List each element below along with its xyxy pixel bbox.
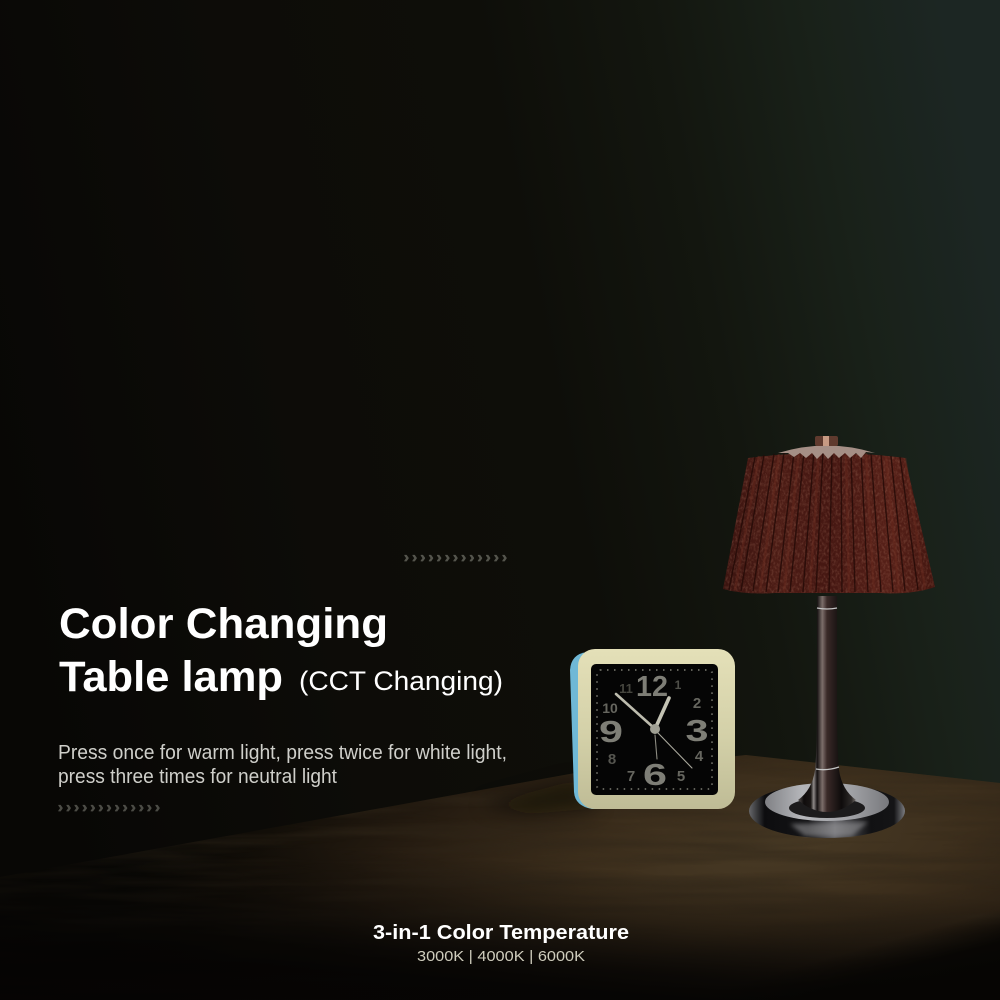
clock numerals: [599, 671, 708, 792]
lamp base: [749, 783, 905, 838]
lamp top cap: [778, 436, 875, 459]
clock hands: [616, 694, 692, 768]
clock numerals: 12: [636, 671, 668, 703]
color temperature values: 3000K | 4000K | 6000K: [417, 948, 585, 965]
clock blue back: [570, 652, 612, 809]
clock numerals: 1: [675, 678, 682, 692]
clock numerals: 3: [686, 713, 708, 748]
clock numerals: 9: [599, 714, 623, 749]
description: Press once for warm light, press twice for white light,: [58, 742, 507, 764]
shade highlights: [735, 451, 925, 592]
table shadow under clock: [480, 780, 600, 814]
lamp shade: [723, 453, 935, 594]
stem rings: [816, 608, 839, 770]
shade fabric texture: [724, 454, 934, 594]
shade pleats: [729, 451, 918, 592]
bottom chevron divider: ›››››››››››››: [58, 799, 160, 816]
clock numerals: 8: [608, 751, 616, 768]
clock numerals: 4: [695, 748, 704, 765]
clock numerals: 11: [619, 681, 633, 696]
clock numerals: 10: [602, 700, 618, 716]
title: Table lamp: [59, 653, 283, 701]
subtitle: (CCT Changing): [299, 666, 503, 696]
description: press three times for neutral light: [58, 766, 337, 788]
top chevron divider: ›››››››››››››: [404, 549, 507, 566]
alarm clock: [570, 649, 735, 809]
clock cream frame: [578, 649, 735, 809]
clock minute marks: [597, 670, 712, 789]
lamp stem: [798, 596, 856, 812]
title: Color Changing: [59, 600, 388, 648]
wooden table: [108, 755, 1000, 1000]
description: [58, 742, 507, 788]
clock numerals: 6: [643, 757, 667, 792]
title: [59, 600, 503, 701]
clock numerals: 5: [677, 768, 685, 785]
clock black face: [591, 664, 718, 795]
table lamp: [720, 436, 940, 838]
clock numerals: 2: [693, 695, 701, 712]
clock numerals: 7: [627, 768, 635, 785]
color temperature heading: 3-in-1 Color Temperature: [373, 922, 629, 944]
